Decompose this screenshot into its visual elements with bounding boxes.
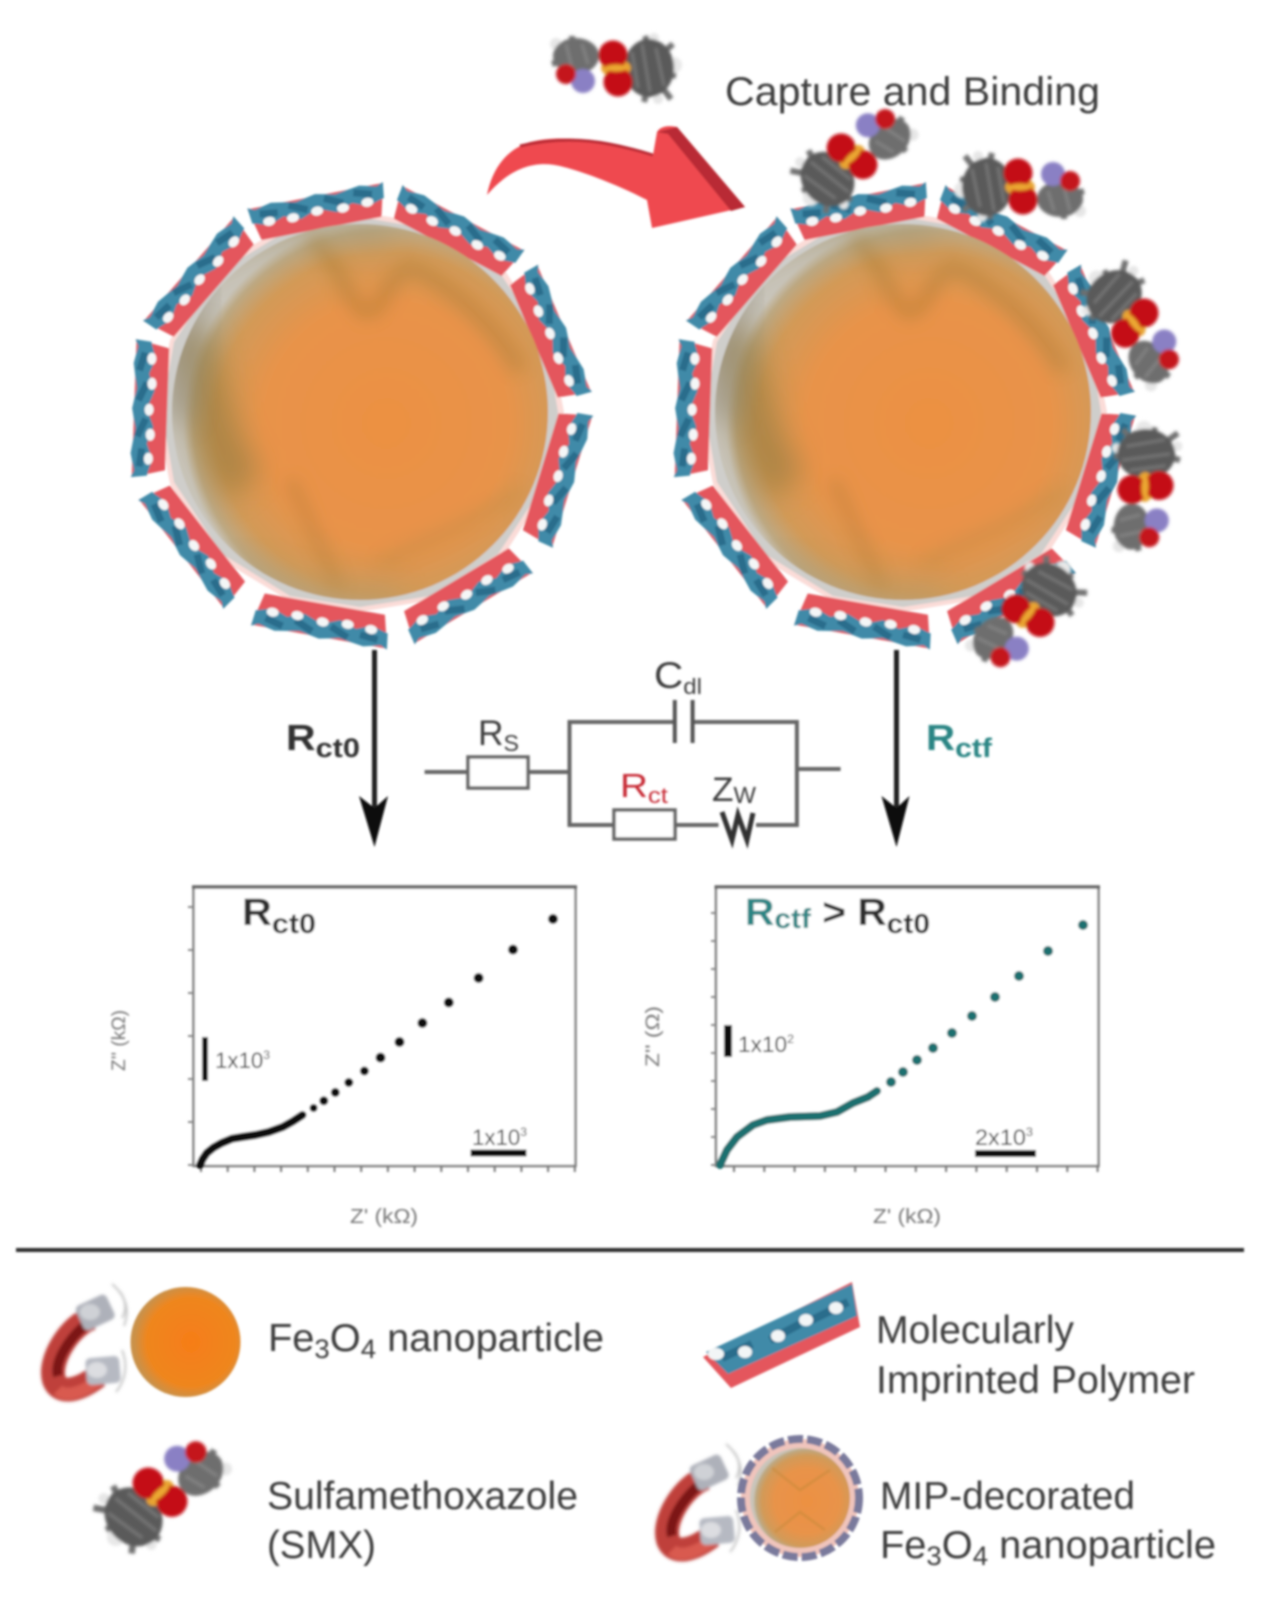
bound SMX molecule 3 bbox=[1066, 249, 1202, 397]
legend item: MIP-decorated nanoparticle: 3 bbox=[926, 1541, 942, 1571]
bound SMX molecule 4 bbox=[1108, 420, 1183, 554]
axis label: left chart x: Z' (kΩ) bbox=[350, 1206, 418, 1228]
chart: Rctf greater than Rct0 Nyquist plot bbox=[714, 887, 1100, 1169]
chart title: ct0 bbox=[272, 908, 316, 939]
y scale label: 1x10 bbox=[738, 1032, 786, 1057]
x scale label: 2x10 bbox=[975, 1125, 1023, 1150]
bound SMX molecule 5 bbox=[959, 542, 1098, 689]
bound SMX molecule 1 bbox=[779, 86, 924, 227]
chart title: R bbox=[745, 892, 774, 934]
chart title: R bbox=[242, 892, 269, 934]
legend item: Fe3O4 nanoparticle bbox=[53, 1284, 604, 1397]
label: Rctf: ctf bbox=[955, 733, 993, 763]
label: Zw: W bbox=[734, 782, 756, 808]
legend item: Fe3O4 nanoparticle: Fe bbox=[268, 1317, 314, 1360]
y scale label: 3 bbox=[263, 1048, 270, 1062]
data points bbox=[200, 914, 558, 1165]
chart title: ctf bbox=[774, 903, 812, 934]
label: Zw: Z bbox=[712, 771, 733, 809]
label: Cdl: C bbox=[654, 655, 681, 696]
left nanoparticle bbox=[130, 181, 594, 651]
x scale label: 3 bbox=[520, 1125, 527, 1139]
axis label: left chart y: Z'' (kΩ) bbox=[109, 1010, 130, 1071]
arrow: right down bbox=[882, 650, 910, 847]
legend item: Molecularly Imprinted Polymer bbox=[703, 1282, 1195, 1402]
label: Rct: ct bbox=[648, 783, 668, 808]
chart: Rct0 Nyquist plot bbox=[190, 887, 577, 1169]
legend item: Fe3O4 nanoparticle: O bbox=[330, 1317, 361, 1360]
legend item: MIP-decorated nanoparticle bbox=[667, 1439, 1216, 1571]
arrow: capture bbox=[487, 126, 745, 228]
label: Rs: S bbox=[504, 730, 519, 756]
legend item: Fe3O4 nanoparticle: nanoparticle bbox=[376, 1317, 604, 1360]
y scale bar bbox=[202, 1037, 208, 1081]
legend item: MIP-decorated nanoparticle: Fe bbox=[880, 1524, 926, 1567]
legend item: Sulfamethoxazole bbox=[81, 1416, 578, 1569]
legend item: MIP-decorated nanoparticle: O bbox=[942, 1524, 973, 1567]
legend item: MIP-decorated nanoparticle: MIP-decorated bbox=[880, 1475, 1135, 1518]
legend item: Molecularly Imprinted Polymer: Molecularly bbox=[876, 1309, 1074, 1352]
right nanoparticle with bound SMX bbox=[673, 86, 1202, 689]
legend item: Fe3O4 nanoparticle: 3 bbox=[314, 1334, 330, 1364]
equivalent circuit bbox=[425, 655, 841, 840]
chart title: ct0 bbox=[887, 908, 930, 939]
bound SMX molecule 2 bbox=[954, 151, 1086, 222]
x scale bar bbox=[975, 1150, 1036, 1157]
legend item: MIP-decorated nanoparticle: nanoparticle bbox=[988, 1524, 1216, 1567]
y scale bar bbox=[724, 1025, 732, 1057]
label: Cdl: dl bbox=[683, 674, 702, 699]
axis label: right chart x: Z' (kΩ) bbox=[873, 1206, 941, 1228]
free SMX molecule bbox=[550, 33, 682, 104]
legend item: Sulfamethoxazole: (SMX) bbox=[267, 1524, 376, 1567]
chart title: > R bbox=[811, 892, 887, 934]
y scale label: 2 bbox=[787, 1032, 794, 1046]
label: Rs: R bbox=[478, 714, 503, 753]
label: Rct: R bbox=[620, 767, 644, 804]
y scale label: 1x10 bbox=[215, 1048, 263, 1073]
axis label: right chart y: Z'' (Ω) bbox=[643, 1006, 664, 1067]
legend bbox=[53, 1282, 1216, 1571]
x scale bar bbox=[470, 1150, 526, 1156]
x scale label: 1x10 bbox=[472, 1125, 520, 1150]
arrow: left down bbox=[359, 650, 388, 847]
x scale label: 3 bbox=[1026, 1125, 1033, 1139]
legend item: MIP-decorated nanoparticle: 4 bbox=[973, 1541, 988, 1571]
label: Rct0: ct0 bbox=[316, 733, 360, 763]
legend item: Sulfamethoxazole: Sulfamethoxazole bbox=[267, 1475, 578, 1518]
legend item: Fe3O4 nanoparticle: 4 bbox=[361, 1334, 376, 1364]
label: Rct0: R bbox=[286, 717, 312, 758]
heading: Capture and Binding: Capture and Binding bbox=[725, 70, 1100, 114]
data points bbox=[720, 920, 1088, 1165]
legend item: Molecularly Imprinted Polymer: Imprinted Polymer bbox=[876, 1359, 1195, 1402]
label: Rctf: R bbox=[926, 717, 952, 758]
